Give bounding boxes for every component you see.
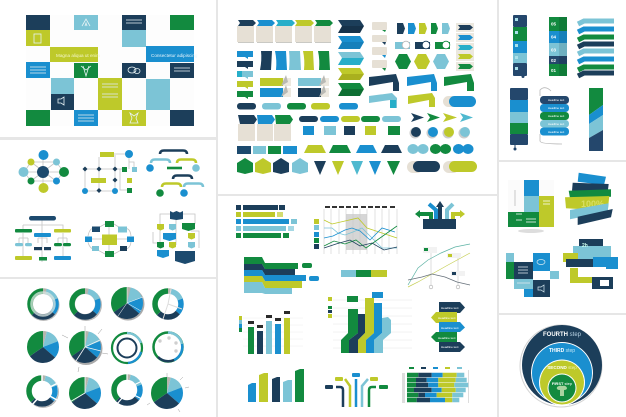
overlapping note widget: 2h bbox=[582, 243, 588, 249]
rounded pill stack with curve bbox=[540, 88, 569, 144]
panel: nested step circles bbox=[520, 325, 602, 407]
numbered column: 02 bbox=[551, 58, 557, 63]
horizontal bar chart bbox=[236, 205, 297, 238]
numbered column bbox=[549, 17, 567, 76]
small tabs bbox=[397, 23, 450, 34]
rounded pill stack with curve: Headline text bbox=[548, 98, 565, 102]
line chart bbox=[314, 206, 397, 254]
pills row bbox=[237, 103, 358, 110]
slanted ribbon list bbox=[578, 21, 614, 76]
alternating arrow signposts: Headline text bbox=[438, 316, 456, 320]
alternating arrow signposts: Headline text bbox=[438, 336, 456, 340]
donut row 1 bbox=[28, 287, 182, 321]
numbered column: 05 bbox=[551, 22, 557, 26]
two-tone pills bbox=[299, 116, 401, 122]
rounded pill stack with curve: Headline text bbox=[548, 130, 565, 134]
panel: mosaic tile layout bbox=[26, 15, 198, 126]
alternating arrow signposts bbox=[431, 302, 465, 352]
puzzle column with icons bbox=[513, 15, 527, 78]
bent flags bbox=[260, 51, 330, 70]
donut row 2 bbox=[35, 326, 182, 372]
two-tone chevrons bbox=[338, 20, 364, 96]
hexagon badges bbox=[237, 158, 308, 174]
panel: nested step circles: THIRD step bbox=[549, 348, 575, 354]
panel: tile widgets bbox=[506, 173, 618, 297]
flowchart: flag blocks bbox=[153, 211, 199, 264]
panel: mosaic tile layout: Magna aliqua ut enim bbox=[56, 53, 100, 58]
column chart with notched tops bbox=[248, 369, 304, 402]
panel: nested step circles: FOURTH step bbox=[543, 332, 582, 338]
square flags bbox=[303, 126, 400, 135]
pills with beige backs bbox=[407, 161, 477, 173]
small speech tags bbox=[237, 51, 253, 99]
down triangles bbox=[314, 161, 400, 175]
numbered column: 04 bbox=[551, 34, 557, 40]
panel: nested step circles: SECOND step bbox=[547, 365, 577, 370]
panel: vertical step columns bbox=[510, 15, 614, 151]
stacked arrow labels bbox=[456, 23, 474, 71]
interlocking column bbox=[510, 88, 528, 150]
panel: pie and donut charts bbox=[26, 287, 189, 412]
curled sticker bars bbox=[260, 75, 329, 97]
flowchart: squares ring bbox=[85, 221, 134, 257]
header arrows with beige notes bbox=[237, 20, 333, 43]
upward arrows fan bbox=[325, 373, 388, 407]
panel: nested step circles: FIRST step bbox=[552, 381, 573, 386]
skewed 3D column chart bbox=[328, 292, 412, 353]
donut row 3 bbox=[26, 373, 189, 412]
panel: mosaic tile layout: Consectetur adipiscing bbox=[151, 53, 198, 58]
panel: charts collection bbox=[236, 201, 470, 407]
alternating arrow signposts: Headline text bbox=[441, 326, 459, 330]
column chart with tags bbox=[239, 311, 303, 354]
cloud bubbles bbox=[408, 144, 474, 154]
round badges bbox=[410, 127, 470, 138]
hexagons bbox=[395, 54, 449, 69]
rounded pill stack with curve: Headline text bbox=[548, 106, 565, 110]
square dashboard widget bbox=[508, 180, 554, 233]
alternating arrow signposts: Headline text bbox=[441, 345, 459, 349]
stacked horizontal bars bbox=[402, 367, 469, 403]
segmented bar bbox=[341, 270, 387, 277]
layered band chart bbox=[244, 257, 319, 294]
arrow headers with notes bbox=[238, 115, 293, 141]
toggles bbox=[395, 41, 450, 49]
curved ribbon column bbox=[589, 88, 603, 151]
folded banners bbox=[369, 74, 476, 108]
flowchart: circle network bbox=[18, 150, 69, 193]
flowchart: pill hierarchy bbox=[15, 216, 71, 262]
flat rectangles bbox=[237, 146, 297, 154]
multi-arrow diagram bbox=[415, 201, 465, 229]
rounded pill stack with curve: Headline text bbox=[548, 114, 565, 118]
flowchart: diamonds and squares bbox=[82, 150, 137, 194]
flowchart: arcs bbox=[146, 150, 203, 197]
numbered column: 03 bbox=[551, 48, 557, 52]
rounded pill stack with curve: Headline text bbox=[548, 122, 565, 126]
play triangles bbox=[411, 113, 473, 122]
dome labels bbox=[304, 145, 402, 153]
slanted stacked banners: 100% bbox=[581, 199, 604, 209]
panel: stickers, arrows and banners bbox=[237, 20, 477, 175]
beige speech bubbles bbox=[372, 22, 387, 71]
alternating arrow signposts: Headline text bbox=[441, 306, 459, 310]
dotted growth line chart bbox=[408, 244, 470, 289]
panel: flowcharts bbox=[15, 150, 203, 264]
mosaic tiles widget bbox=[506, 253, 559, 297]
numbered column: 01 bbox=[551, 68, 557, 73]
